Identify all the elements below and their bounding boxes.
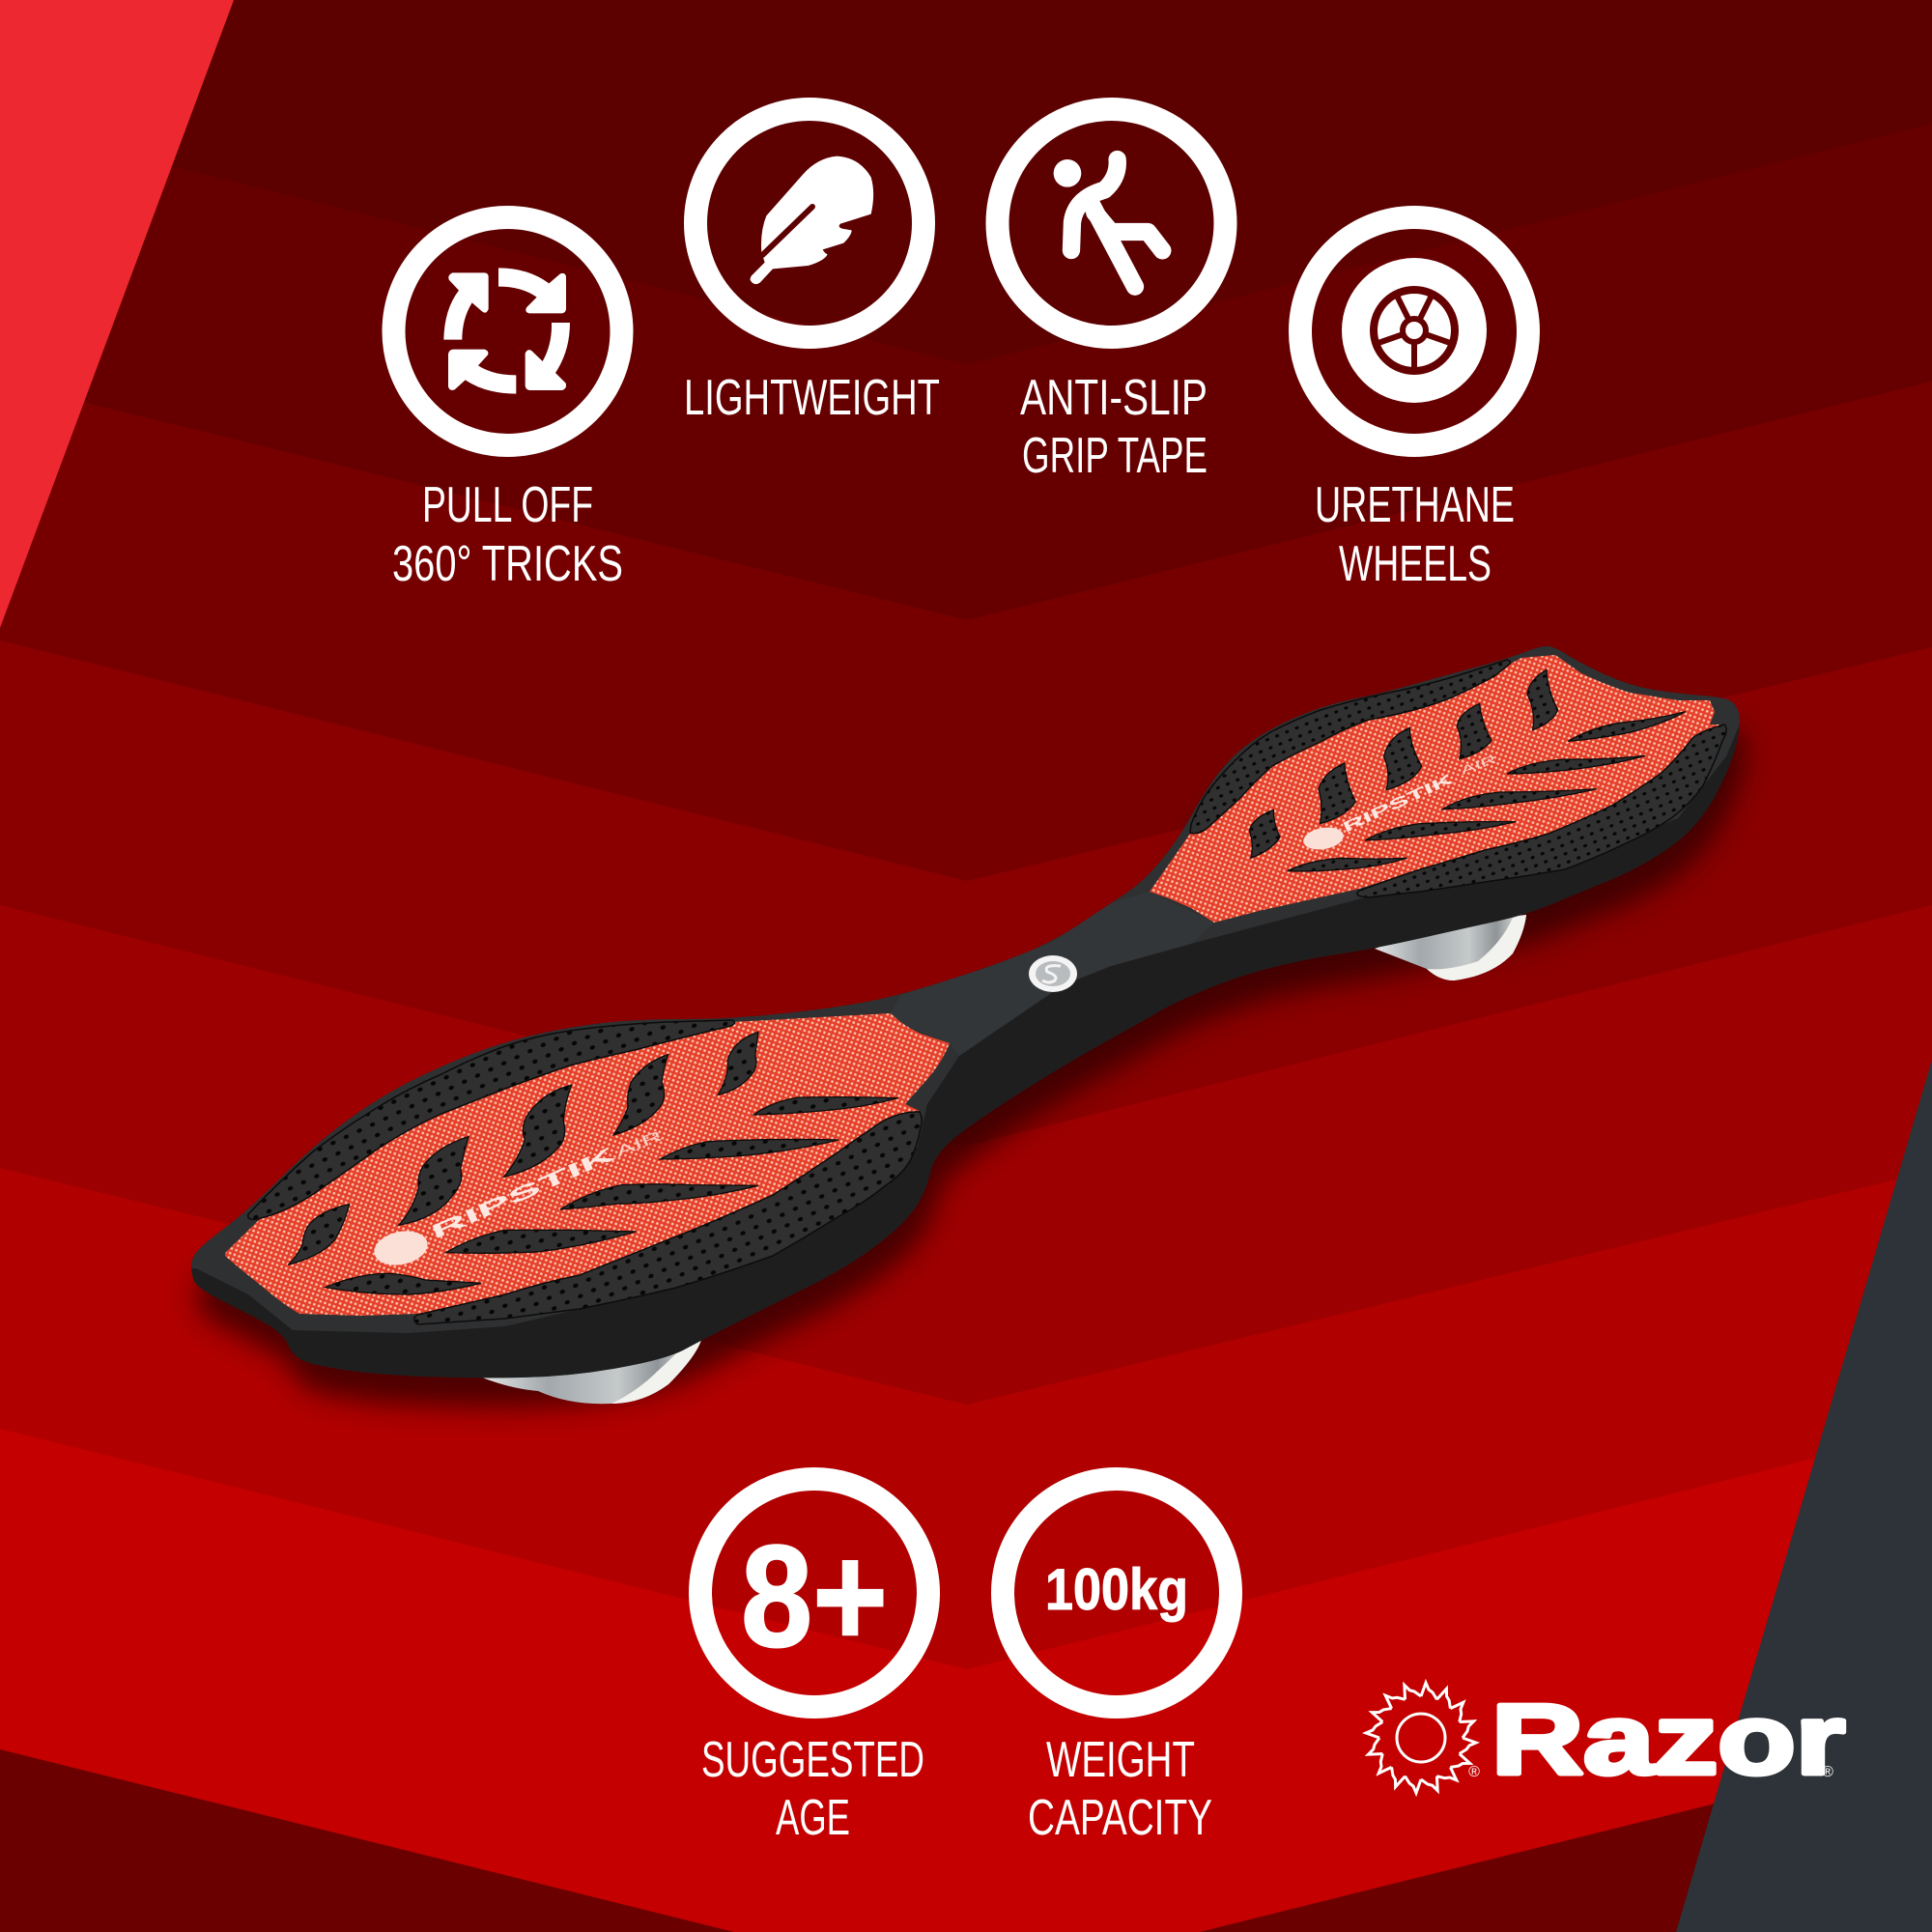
left wheel [482, 1340, 701, 1404]
badge: 100kg: 100kg [1045, 1557, 1188, 1622]
icon: rotating arrows badge [394, 217, 622, 445]
board body [191, 645, 1740, 1378]
left RipStik logo: RIPSTIK [428, 1143, 620, 1244]
label: anti-slip grip tape [1020, 370, 1208, 484]
board shadow [180, 713, 1762, 1427]
feature: urethane wheels [1300, 217, 1528, 592]
logo: Razor [1364, 1681, 1845, 1795]
center torsion sticker [1029, 955, 1077, 992]
product: RipStik caster board [145, 618, 1797, 1449]
registered marks [1468, 1764, 1833, 1780]
feature: lightweight [684, 109, 940, 426]
right RipStik logo: RIPSTIK [1341, 771, 1456, 837]
feature: pull off 360 tricks [392, 217, 623, 592]
right wheel [1375, 915, 1526, 980]
label: suggested age [701, 1732, 924, 1846]
badge: 100kg [1003, 1479, 1231, 1707]
badge: 8+: 8+ [741, 1515, 888, 1677]
right grip tape [1150, 655, 1724, 923]
registered marks: ® [1468, 1764, 1480, 1780]
left RipStik logo: AIR [613, 1127, 665, 1161]
label: weight capacity: CAPACITY [1028, 1790, 1212, 1846]
right upper pad [1190, 660, 1511, 834]
label: urethane wheels [1315, 477, 1515, 592]
label: suggested age: AGE [776, 1790, 850, 1846]
label: anti-slip grip tape: GRIP TAPE [1022, 428, 1208, 484]
left upper pad [248, 1020, 734, 1219]
icon: wheel badge [1300, 217, 1528, 445]
left lower pad [414, 1112, 922, 1324]
icon: saw blade [1364, 1681, 1478, 1795]
label: anti-slip grip tape: ANTI-SLIP [1020, 370, 1208, 426]
label: weight capacity [1028, 1732, 1212, 1846]
label: urethane wheels: URETHANE [1315, 477, 1515, 533]
right RipStik logo [1301, 752, 1498, 852]
left tread leaves [288, 1085, 636, 1294]
label: suggested age: SUGGESTED [701, 1732, 924, 1788]
right lower pad [1357, 724, 1726, 897]
right tread leaves, near neck [1249, 727, 1422, 871]
left RipStik logo [371, 1127, 665, 1269]
spec: suggested age [700, 1479, 928, 1846]
badge: 8+ [700, 1479, 928, 1707]
label: urethane wheels: WHEELS [1339, 536, 1492, 592]
icon: falling person badge [997, 109, 1225, 337]
registered marks: ® [1822, 1764, 1833, 1780]
label: pull off 360 tricks [392, 477, 623, 592]
right RipStik logo: AIR [1459, 752, 1498, 778]
label: pull off 360 tricks: 360° TRICKS [392, 536, 623, 592]
label: lightweight: LIGHTWEIGHT [684, 370, 940, 426]
label: pull off 360 tricks: PULL OFF [422, 477, 593, 533]
left grip tape [225, 1013, 950, 1316]
label: weight capacity: WEIGHT [1046, 1732, 1195, 1788]
wordmark: Razor [1492, 1684, 1845, 1795]
left tread leaves, front [560, 1032, 898, 1209]
right tread leaves, tail [1365, 669, 1686, 840]
feature: anti-slip grip tape [997, 109, 1225, 484]
spec: weight capacity [1003, 1479, 1231, 1846]
icon: feather badge [696, 109, 923, 337]
